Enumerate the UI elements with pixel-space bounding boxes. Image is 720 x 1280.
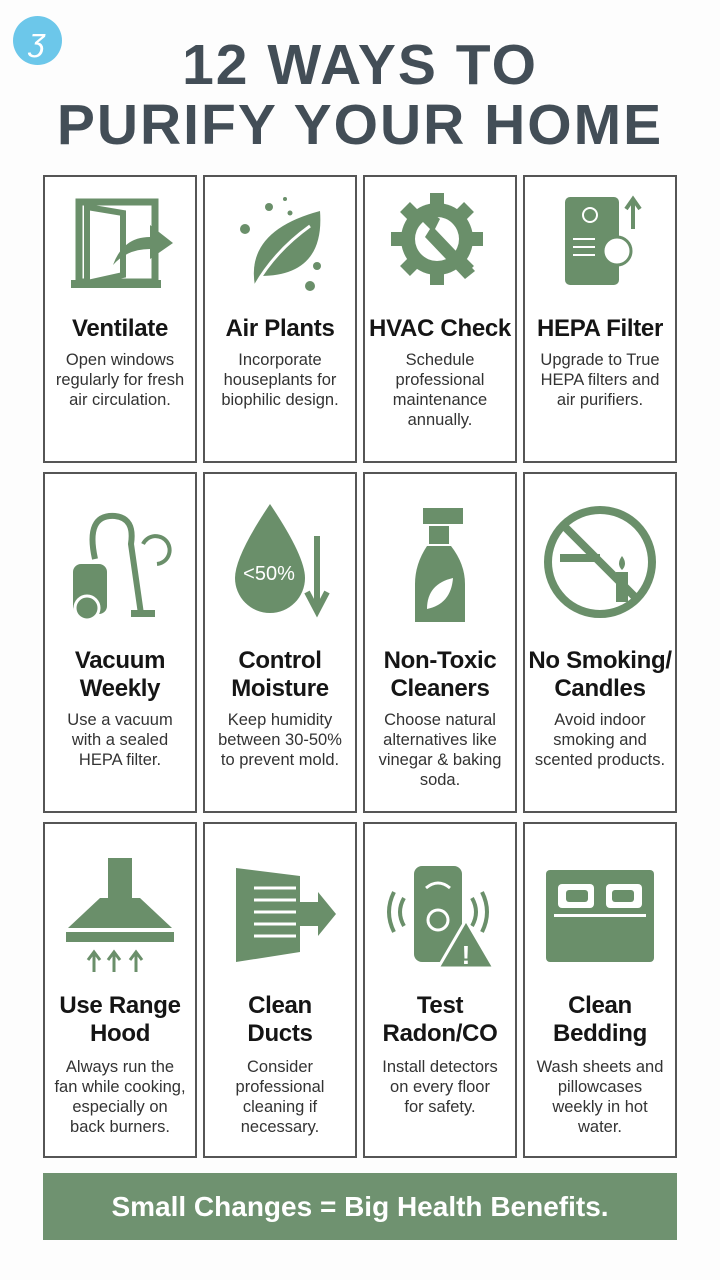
cell: HVAC: Schedule bbox=[406, 350, 474, 369]
logo bbox=[13, 16, 62, 65]
cell: HVAC: maintenance bbox=[393, 390, 487, 409]
cell: Vacuum: Weekly bbox=[80, 675, 160, 702]
cell: Moisture: Moisture bbox=[231, 675, 329, 702]
logo: ʒ bbox=[30, 22, 46, 58]
icon: bed bbox=[546, 870, 654, 962]
cell: HVAC: annually. bbox=[408, 410, 472, 429]
cell: HEPA bbox=[523, 175, 677, 463]
cell: Radon: Install detectors bbox=[382, 1057, 498, 1076]
cell: Radon: on every floor bbox=[390, 1077, 490, 1096]
cell: Non-Toxic: soda. bbox=[420, 770, 460, 789]
cell: HEPA: air purifiers. bbox=[557, 390, 643, 409]
cell: Radon: Radon/CO bbox=[383, 1020, 497, 1047]
cell: Non-Toxic: alternatives like bbox=[383, 730, 497, 749]
cell: Ventilate: Open windows bbox=[66, 350, 174, 369]
cell: Radon: for safety. bbox=[404, 1097, 476, 1116]
cell: Moisture: Keep humidity bbox=[228, 710, 332, 729]
cell: Range Hood: Use Range bbox=[59, 992, 181, 1019]
cell: HEPA: HEPA filters and bbox=[541, 370, 659, 389]
cell: Air Plants: houseplants for bbox=[224, 370, 336, 389]
cell: Clean Ducts bbox=[203, 822, 357, 1158]
icon: gear wrench bbox=[391, 193, 483, 285]
cell: Air Plants: biophilic design. bbox=[221, 390, 339, 409]
cell: HEPA: Upgrade to True bbox=[540, 350, 660, 369]
cell: Vacuum bbox=[43, 472, 197, 813]
cell: Bedding: pillowcases bbox=[558, 1077, 642, 1096]
cell: Moisture: to prevent mold. bbox=[221, 750, 339, 769]
cell: Non-Toxic: Choose natural bbox=[384, 710, 496, 729]
cell: Range Hood: especially on bbox=[72, 1097, 168, 1116]
footer banner bbox=[43, 1173, 677, 1240]
cell: Radon bbox=[363, 822, 517, 1158]
cell: Ventilate bbox=[43, 175, 197, 463]
cell: Clean Ducts: necessary. bbox=[241, 1117, 319, 1136]
cell: Ventilate: regularly for fresh bbox=[56, 370, 184, 389]
cell: No Smoking: No Smoking/ bbox=[528, 647, 672, 674]
cell: HEPA: HEPA Filter bbox=[537, 315, 663, 342]
cell: Ventilate: Ventilate bbox=[72, 315, 168, 342]
cell: Moisture bbox=[203, 472, 357, 813]
cell: Non-Toxic: Non-Toxic bbox=[384, 647, 496, 674]
icon: leaf bbox=[240, 197, 321, 291]
cell: HVAC: HVAC Check bbox=[369, 315, 511, 342]
cell: Bedding: weekly in hot bbox=[552, 1097, 648, 1116]
cell: Air Plants: Air Plants bbox=[225, 315, 335, 342]
cell: Vacuum: Vacuum bbox=[75, 647, 165, 674]
icon: detector: ! bbox=[462, 940, 470, 970]
cell: Bedding: Clean bbox=[568, 992, 632, 1019]
cell: HVAC: professional bbox=[396, 370, 484, 389]
cell: Air Plants: Incorporate bbox=[238, 350, 322, 369]
cell: No Smoking: Avoid indoor bbox=[554, 710, 646, 729]
icon: no smoking bbox=[544, 506, 656, 618]
cell: Ventilate: air circulation. bbox=[69, 390, 171, 409]
cell: Vacuum: Use a vacuum bbox=[67, 710, 173, 729]
icon: vacuum bbox=[73, 512, 172, 618]
cell: Radon: Test bbox=[417, 992, 463, 1019]
cell: No Smoking bbox=[523, 472, 677, 813]
cell: Air Plants bbox=[203, 175, 357, 463]
cell: Non-Toxic: vinegar & baking bbox=[379, 750, 501, 769]
icon: spray bbox=[415, 508, 465, 622]
cell: Moisture: between 30-50% bbox=[218, 730, 342, 749]
cell: No Smoking: smoking and bbox=[553, 730, 647, 749]
icon: purifier bbox=[565, 196, 642, 285]
cell: Clean Ducts: Clean bbox=[248, 992, 312, 1019]
cell: Clean Ducts: professional bbox=[236, 1077, 324, 1096]
cell: Vacuum: with a sealed bbox=[72, 730, 168, 749]
cell: Range Hood: Hood bbox=[90, 1020, 150, 1047]
cell: Range Hood: Always run the bbox=[66, 1057, 174, 1076]
icon: drop bbox=[235, 504, 330, 618]
icon: duct bbox=[236, 868, 336, 962]
cell: Range Hood bbox=[43, 822, 197, 1158]
cell: Bedding bbox=[523, 822, 677, 1158]
cell: Range Hood: back burners. bbox=[70, 1117, 170, 1136]
cell: Moisture: Control bbox=[238, 647, 322, 674]
cell: Clean Ducts: Consider bbox=[247, 1057, 313, 1076]
title: PURIFY YOUR HOME bbox=[57, 93, 663, 157]
footer banner: Small Changes = Big Health Benefits. bbox=[111, 1191, 609, 1222]
icon: window bbox=[71, 198, 173, 288]
cell: HVAC bbox=[363, 175, 517, 463]
cell: No Smoking: Candles bbox=[554, 675, 646, 702]
cell: No Smoking: scented products. bbox=[535, 750, 665, 769]
cell: Clean Ducts: Ducts bbox=[247, 1020, 313, 1047]
cell: Range Hood: fan while cooking, bbox=[54, 1077, 186, 1096]
title: 12 WAYS TO bbox=[182, 33, 538, 97]
icon: range hood bbox=[66, 858, 174, 972]
icon: drop: <50% bbox=[243, 563, 295, 585]
cell: Non-Toxic bbox=[363, 472, 517, 813]
title bbox=[57, 33, 663, 157]
cell: Bedding: Bedding bbox=[553, 1020, 647, 1047]
cell: Bedding: water. bbox=[578, 1117, 622, 1136]
cell: Bedding: Wash sheets and bbox=[537, 1057, 663, 1076]
cell: Vacuum: HEPA filter. bbox=[79, 750, 161, 769]
cell: Non-Toxic: Cleaners bbox=[390, 675, 490, 702]
icon: detector bbox=[387, 866, 492, 970]
cell: Clean Ducts: cleaning if bbox=[243, 1097, 317, 1116]
